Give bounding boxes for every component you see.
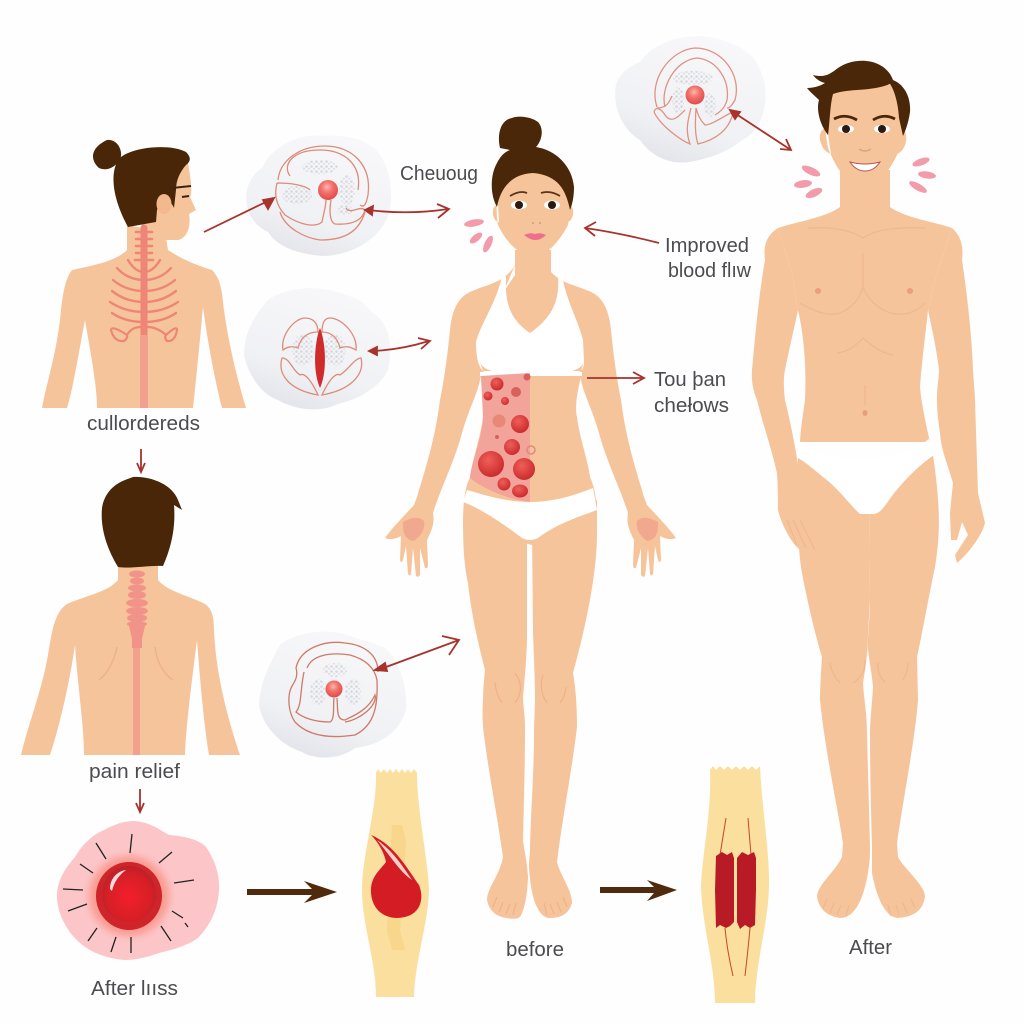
right arm and shoulder: [546, 265, 676, 577]
red inner: [102, 866, 156, 922]
right leg: [868, 455, 939, 918]
label: pain relief: pain relief: [89, 761, 180, 783]
arrow: section 1 to woman: [365, 204, 449, 218]
tissue outlines: [281, 318, 362, 395]
radiating ticks: [63, 834, 194, 953]
blood drop: [371, 835, 421, 918]
navel: [862, 410, 868, 416]
icon: muscle with blood drop: [362, 769, 429, 997]
hair: [102, 477, 182, 568]
arrow: section 2 to woman: [369, 338, 430, 355]
tissue outlines: [276, 146, 369, 240]
red node: [326, 680, 342, 698]
vertebrae: [126, 570, 148, 648]
spinal cord: [133, 648, 140, 755]
icon: inflamed lesion: [57, 821, 219, 960]
hand over hip: [777, 465, 823, 554]
red muscle bundles: [715, 852, 756, 929]
inflamed skin panel: [470, 373, 530, 502]
spine and ribs: [110, 228, 178, 341]
red centre: [96, 862, 162, 930]
white briefs: [463, 488, 597, 540]
back torso and arms: [42, 225, 246, 408]
face and neck: [493, 170, 573, 256]
grey specks: [292, 334, 346, 366]
left arm and hand: [752, 228, 823, 554]
red node: [318, 180, 338, 200]
drop highlight: [377, 840, 412, 880]
pain marks: [464, 218, 495, 254]
label: cullordereds: cullordereds: [87, 413, 200, 435]
label: After: After: [849, 937, 892, 959]
label: Improved blood flow: Improved: [665, 235, 749, 257]
cloud shape: [259, 632, 406, 758]
label: before: before: [506, 939, 564, 961]
nipples: [815, 288, 913, 294]
arrow: tou pan: [587, 372, 644, 384]
cross-section 4: [615, 36, 766, 163]
smile: [850, 162, 880, 171]
cross-section 2: [244, 288, 390, 409]
face: [820, 85, 906, 187]
hair: [807, 61, 910, 136]
face profile: [140, 163, 196, 240]
cloud shape: [246, 135, 391, 256]
body shading: [800, 228, 925, 916]
white briefs: [797, 439, 934, 514]
label: After liiss: After lııss: [91, 978, 178, 1000]
cloud shape: [244, 288, 390, 409]
arrow: brown 1: [247, 881, 337, 903]
arrow: improved blood flow: [585, 222, 659, 243]
tissue outlines: [289, 642, 378, 737]
left arm and shoulder: [385, 265, 515, 577]
back torso and arms: [21, 560, 240, 755]
hand finger lines: [787, 520, 815, 550]
red lesion: [315, 328, 325, 388]
figure: man: [752, 61, 985, 918]
icon: healed muscle: [701, 766, 769, 1003]
hair with bun: [93, 140, 190, 227]
figure: back view with spine: [21, 477, 240, 755]
figure: woman: [385, 117, 676, 919]
grey specks: [282, 160, 355, 215]
grey specks: [310, 663, 361, 705]
arrow: down 2: [136, 789, 144, 812]
cross-section 1: [246, 135, 391, 256]
eye and brow: [172, 186, 191, 197]
right leg: [529, 500, 597, 918]
torso: [778, 170, 952, 442]
eyes and brows: [834, 116, 895, 133]
arrow: section 4 to man: [730, 110, 791, 150]
red node: [686, 86, 704, 104]
cloud shape: [615, 36, 766, 163]
hair with bun: [492, 117, 574, 210]
label: Tou pan chetows: chełows: [654, 395, 729, 417]
torso: [463, 250, 597, 545]
left leg: [463, 520, 528, 919]
arrow: down 1: [137, 449, 145, 472]
tissue outlines: [654, 48, 736, 144]
label: Improved blood flow: blood flıw: [668, 260, 752, 282]
muscle band: [701, 766, 769, 1003]
pain marks: [794, 156, 936, 200]
white top: [476, 275, 584, 376]
back creases: [99, 647, 173, 680]
glow: [89, 856, 169, 936]
ear: [156, 194, 172, 214]
grey specks: [672, 71, 716, 117]
cross-section 3: [259, 632, 406, 758]
knee and toe creases: [493, 673, 567, 915]
label: Tou pan chetows: Tou þan: [654, 369, 726, 391]
muscle band: [362, 769, 429, 997]
eyes: [510, 192, 560, 210]
pink tissue: [57, 821, 219, 960]
label: Cheuoug: Cheuoug: [400, 163, 478, 185]
lower spinal cord: [140, 335, 148, 408]
under-bust skin: [480, 362, 584, 371]
arrow: section 3 to woman: [375, 636, 459, 671]
highlight: [110, 870, 126, 891]
lips: [524, 233, 546, 240]
nose: [859, 149, 871, 151]
vessels: [720, 818, 751, 976]
figure: side-view person with rib cage: [42, 140, 246, 408]
left leg: [797, 455, 870, 918]
arrow: figure to section 1: [204, 198, 274, 232]
palm shading: [403, 518, 658, 541]
nose: [532, 222, 541, 224]
label: Improved blood flow: [665, 235, 752, 282]
arrow: brown 2: [600, 880, 677, 901]
inflamed cells: [478, 374, 535, 498]
right arm and hand: [928, 228, 985, 563]
label: Tou pan chetows: [654, 369, 729, 417]
muscle shading: [387, 825, 406, 950]
